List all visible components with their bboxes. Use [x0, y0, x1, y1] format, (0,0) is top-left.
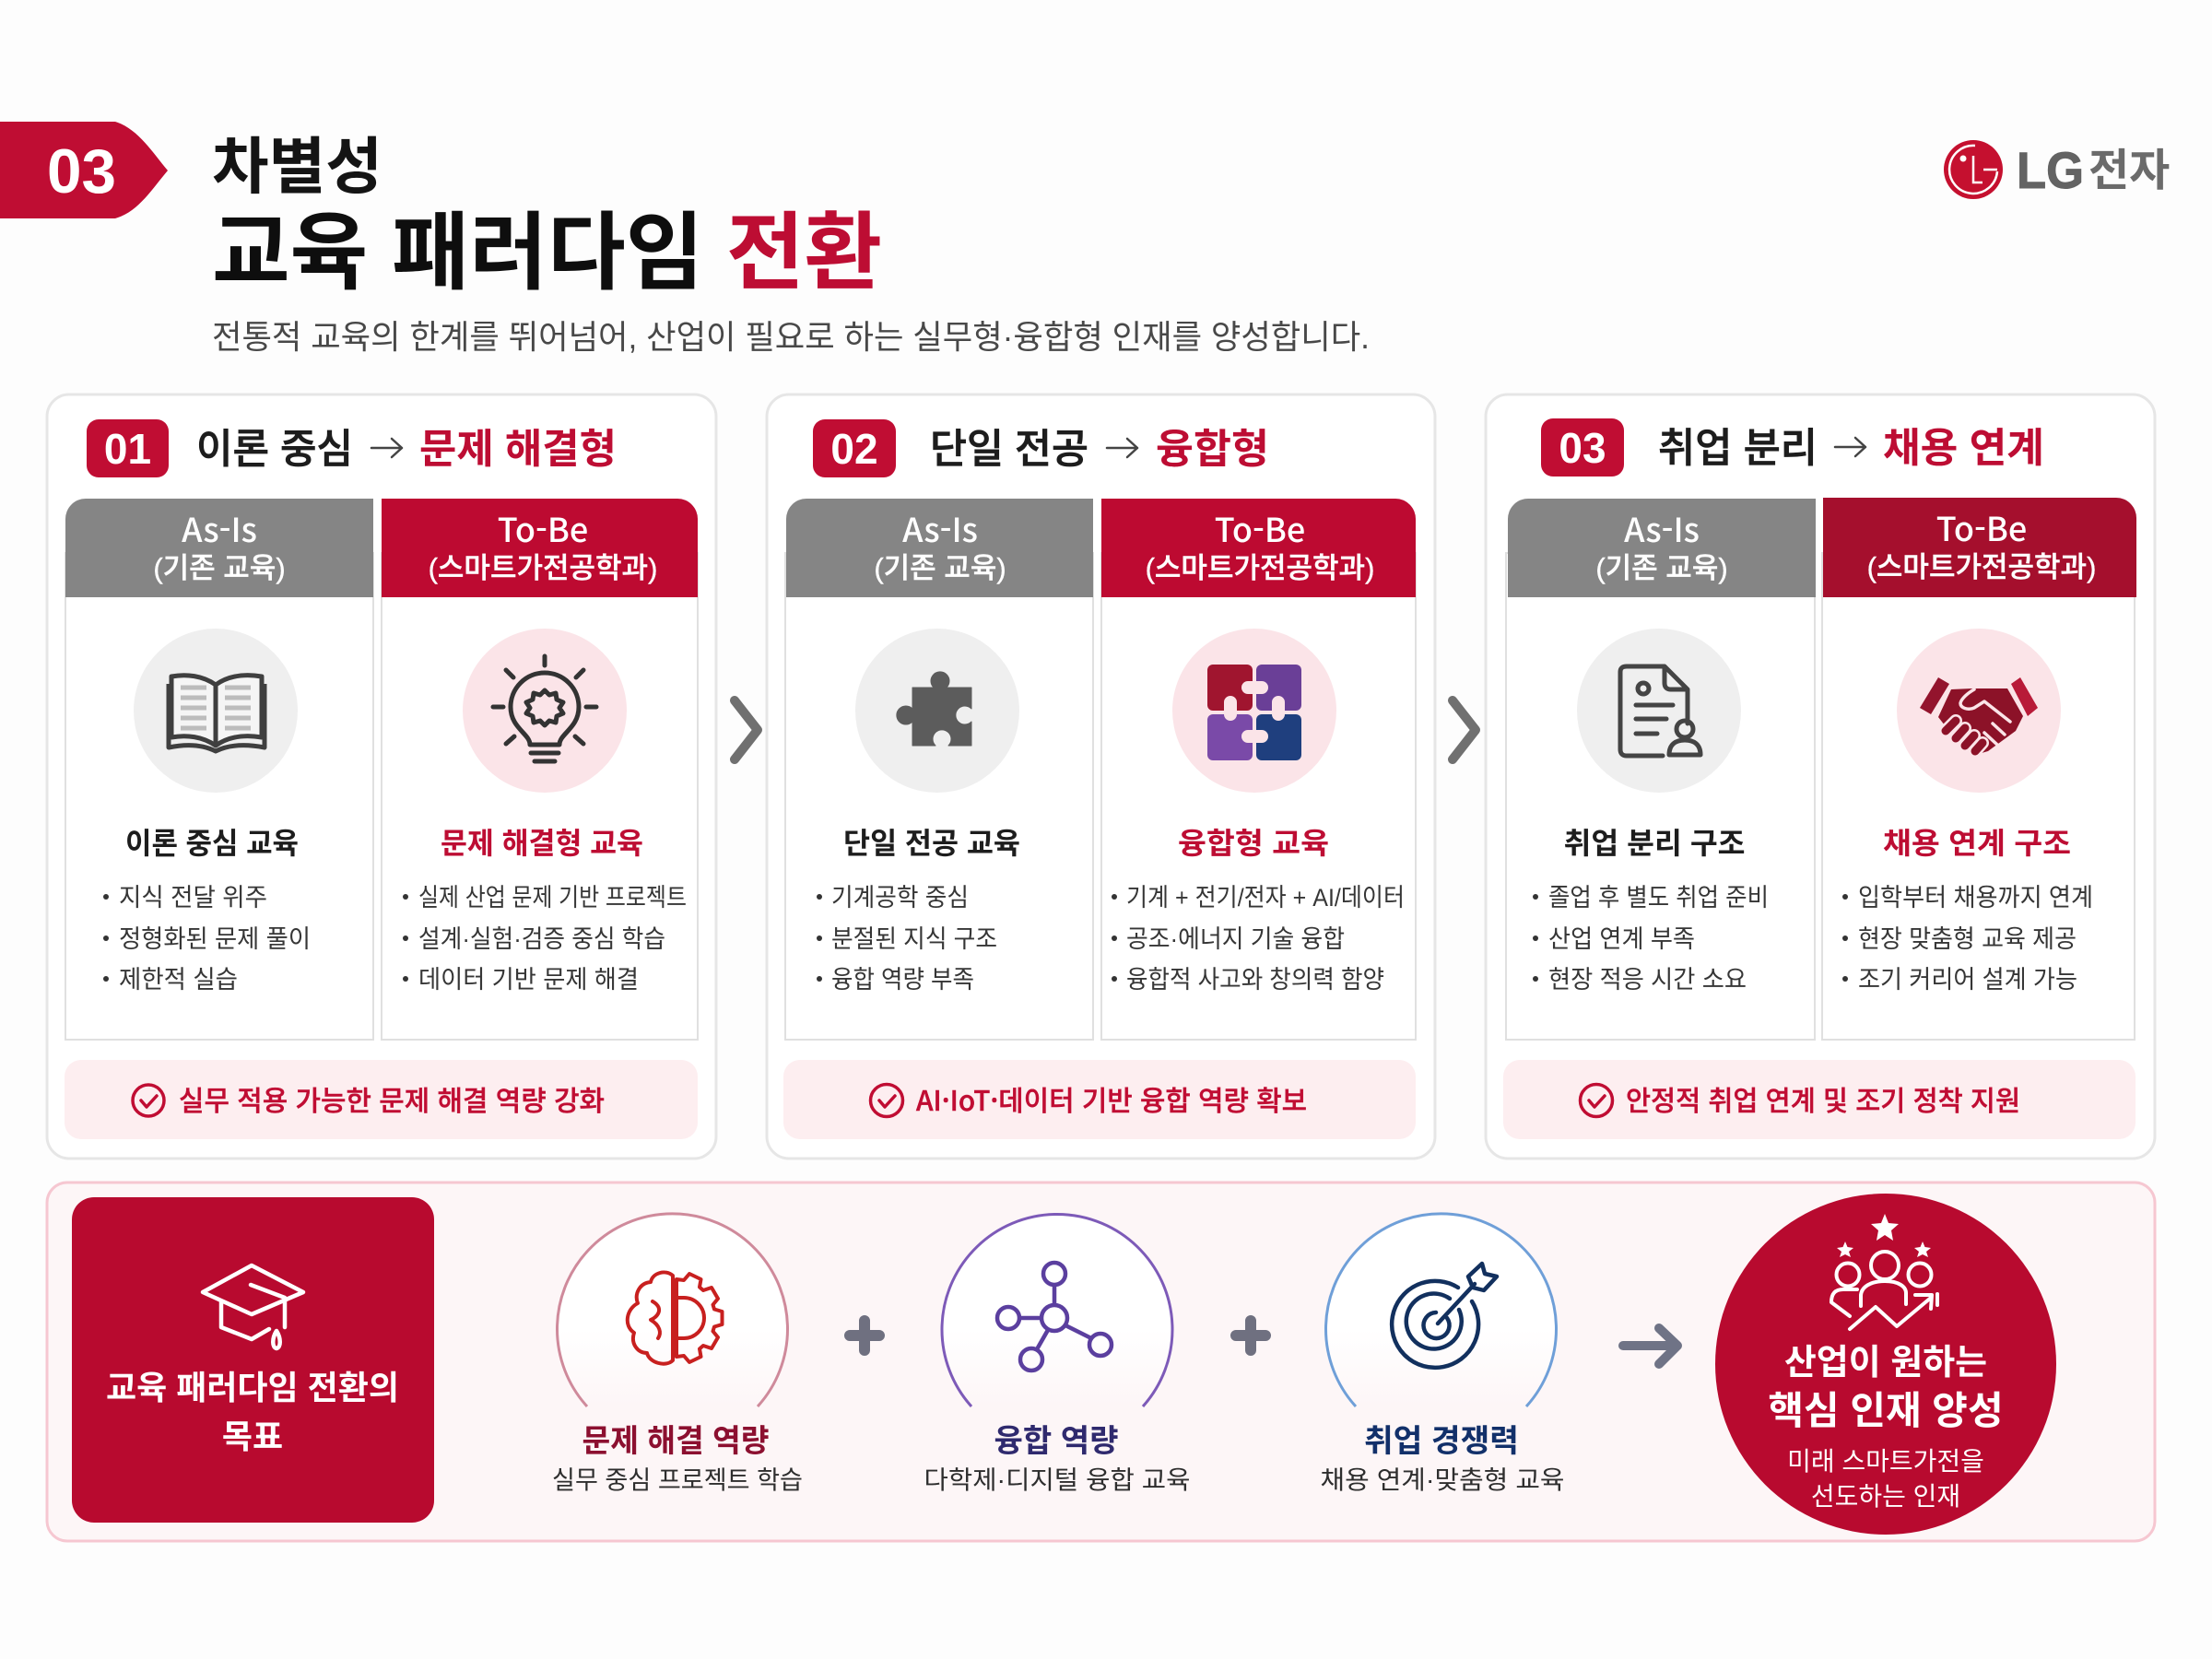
as-is column: 단일 전공 교육: [843, 827, 1020, 860]
title: 교육 패러다임: [212, 206, 703, 300]
panel heading: [196, 427, 617, 472]
panel heading: 문제 해결형: [419, 427, 617, 472]
as-is column: (기존 교육): [153, 552, 286, 584]
as-is bullets: 제한적 실습: [119, 966, 238, 994]
to-be column: To-Be: [498, 504, 588, 552]
as-is column: [785, 499, 1093, 1040]
icon: puzzle piece: [897, 672, 971, 746]
to-be bullets: 조기 커리어 설계 가능: [1858, 966, 2077, 994]
to-be column: [382, 499, 698, 1040]
to-be column: [1822, 498, 2136, 1040]
item: 취업 경쟁력: 채용 연계·맞춤형 교육: [1320, 1465, 1565, 1494]
item: 취업 경쟁력: [1320, 1214, 1565, 1494]
logo: LG전자: [1944, 140, 2170, 199]
icon: handshake: [1920, 677, 2038, 753]
section number tag: 03: [47, 136, 116, 206]
as-is bullets: 지식 전달 위주: [119, 884, 267, 912]
icon: network: [997, 1263, 1112, 1371]
to-be bullets: [1842, 884, 2093, 994]
as-is column: 취업 분리 구조: [1563, 827, 1746, 860]
panel heading: 이론 중심: [196, 427, 353, 472]
logo: LG전자: 전자: [2088, 147, 2170, 195]
panel heading: [930, 427, 1269, 472]
callout: [783, 1060, 1416, 1139]
to-be bullets: 데이터 기반 문제 해결: [418, 966, 639, 994]
as-is bullets: 졸업 후 별도 취업 준비: [1548, 884, 1769, 912]
to-be bullets: 공조·에너지 기술 융합: [1126, 925, 1345, 953]
icon: lightbulb with gear: [493, 656, 596, 761]
as-is bullets: 현장 적응 시간 소요: [1548, 966, 1747, 994]
icon: open book: [169, 676, 265, 751]
result circle: 선도하는 인재: [1811, 1482, 1960, 1511]
to-be column: To-Be: [1215, 504, 1305, 552]
logo: LG전자: LG: [2017, 141, 2084, 199]
to-be bullets: 융합적 사고와 창의력 함양: [1126, 966, 1384, 994]
to-be bullets: [403, 884, 687, 994]
to-be column: (스마트가전공학과): [1867, 551, 2096, 583]
to-be bullets: 설계·실험·검증 중심 학습: [418, 925, 665, 953]
to-be column: 문제 해결형 교육: [441, 827, 643, 860]
to-be bullets: [1112, 884, 1405, 994]
panel heading: 채용 연계: [1883, 426, 2044, 471]
as-is column: (기존 교육): [874, 552, 1006, 584]
arrow: chevron 1: [735, 700, 758, 759]
icon: target with arrow: [1392, 1264, 1497, 1368]
item: 문제 해결 역량: [552, 1214, 803, 1494]
to-be bullets: 입학부터 채용까지 연계: [1858, 884, 2093, 912]
as-is column: [65, 499, 373, 1040]
to-be column: 융합형 교육: [1178, 827, 1329, 860]
as-is column: As-Is: [182, 504, 257, 552]
as-is column: As-Is: [902, 504, 978, 552]
goal box: 교육 패러다임 전환의: [106, 1369, 399, 1406]
arrow: chevron 2: [1453, 700, 1476, 759]
arrow: to result: [1623, 1328, 1677, 1364]
subtitle: 전통적 교육의 한계를 뛰어넘어, 산업이 필요로 하는 실무형·융합형 인재를 양성합니다.: [212, 318, 1370, 356]
callout: [1503, 1060, 2136, 1139]
item: 융합 역량: [924, 1214, 1191, 1494]
section number tag: [0, 122, 168, 218]
as-is column: (기존 교육): [1595, 552, 1728, 584]
as-is column: [1506, 499, 1816, 1040]
to-be bullets: 기계 + 전기/전자 + AI/데이터: [1126, 884, 1405, 912]
item: 문제 해결 역량: 실무 중심 프로젝트 학습: [552, 1465, 803, 1494]
callout: [65, 1060, 698, 1139]
as-is bullets: [1533, 884, 1769, 994]
to-be column: To-Be: [1936, 503, 2027, 551]
as-is bullets: 산업 연계 부족: [1548, 925, 1695, 953]
item: 취업 경쟁력: 취업 경쟁력: [1364, 1424, 1519, 1459]
badge 03: [1541, 418, 1624, 477]
badge 02: 02: [830, 425, 878, 473]
to-be bullets: 현장 맞춤형 교육 제공: [1858, 925, 2077, 953]
panel heading: 단일 전공: [930, 427, 1088, 472]
panel: 01 이론 중심 → 문제 해결형: [47, 394, 716, 1159]
goal box: [72, 1197, 434, 1523]
to-be column: (스마트가전공학과): [429, 552, 657, 584]
title: 차별성: [212, 133, 382, 202]
panel heading: 취업 분리: [1658, 426, 1818, 471]
plus: [850, 1321, 879, 1350]
as-is column: As-Is: [1624, 504, 1700, 552]
panel heading: 융합형: [1156, 427, 1269, 472]
callout: 실무 적용 가능한 문제 해결 역량 강화: [179, 1078, 605, 1119]
icon: brain and gear: [628, 1272, 723, 1364]
panel: 02 단일 전공 → 융합형: [767, 394, 1435, 1159]
item: 융합 역량: 융합 역량: [994, 1424, 1119, 1459]
to-be column: (스마트가전공학과): [1146, 552, 1374, 584]
panel heading: [1658, 426, 2044, 471]
as-is column: 이론 중심 교육: [125, 827, 299, 860]
to-be column: [1101, 499, 1416, 1040]
as-is bullets: 정형화된 문제 풀이: [119, 925, 311, 953]
title: 전환: [726, 206, 882, 300]
callout: AI·IoT·데이터 기반 융합 역량 확보: [916, 1078, 1307, 1119]
as-is bullets: [817, 884, 997, 994]
badge 03: 03: [1559, 424, 1606, 472]
to-be bullets: 실제 산업 문제 기반 프로젝트: [418, 884, 687, 912]
icon: people with stars: [1831, 1214, 1937, 1329]
badge 01: [87, 419, 169, 477]
badge 01: 01: [104, 425, 151, 473]
goal box: 목표: [222, 1418, 283, 1455]
as-is bullets: 분절된 지식 구조: [831, 925, 997, 953]
to-be column: 채용 연계 구조: [1883, 827, 2071, 860]
icon: graduation cap: [203, 1265, 303, 1348]
result circle: 미래 스마트가전을: [1787, 1447, 1984, 1476]
plus: [1236, 1321, 1265, 1350]
panel: 목표: [47, 1182, 2155, 1541]
as-is bullets: 기계공학 중심: [831, 884, 969, 912]
callout: 안정적 취업 연계 및 조기 정착 지원: [1626, 1078, 2020, 1119]
result circle: [1715, 1194, 2056, 1535]
title: [212, 133, 882, 300]
panel: 03 취업 분리 → 채용 연계: [1486, 394, 2155, 1159]
icon: four puzzle pieces: [1207, 665, 1301, 760]
item: 융합 역량: 다학제·디지털 융합 교육: [924, 1465, 1191, 1494]
result circle: 핵심 인재 양성: [1768, 1389, 2004, 1432]
icon: document with person: [1620, 666, 1700, 756]
as-is bullets: [103, 884, 311, 994]
badge 02: [813, 419, 896, 477]
as-is bullets: 융합 역량 부족: [831, 966, 974, 994]
item: 문제 해결 역량: 문제 해결 역량: [582, 1424, 769, 1459]
result circle: 산업이 원하는: [1784, 1344, 1987, 1382]
